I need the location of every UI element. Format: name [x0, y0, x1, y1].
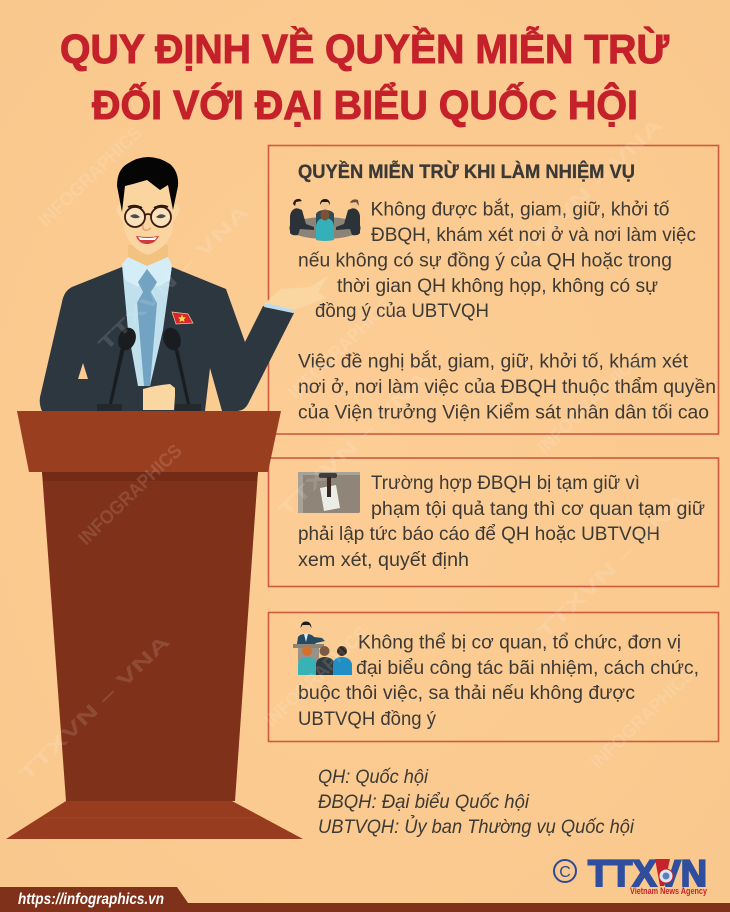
- panel: immunity on duty: [268, 146, 718, 434]
- paragraph: report to the National Assembly: xem xét, quyết định: [298, 549, 469, 571]
- eyebrows: [128, 206, 168, 208]
- copyright logo: Vietnam News Agency: [630, 886, 707, 896]
- abbreviation notes: ĐBQH: Đại biểu Quốc hội: [318, 791, 530, 813]
- watermarks: INFOGRAPHICS: [587, 665, 699, 774]
- watermarks: INFOGRAPHICS: [75, 441, 187, 550]
- watermarks: TTXVN – VNA: [95, 201, 254, 356]
- footer bar with URL: [0, 887, 730, 912]
- watermarks: TTXVN – VNA: [16, 631, 175, 786]
- shirt: [122, 265, 172, 386]
- speaker figure: [40, 157, 329, 411]
- neck: [128, 245, 168, 268]
- pocket: [78, 363, 88, 379]
- microphones: [97, 325, 201, 411]
- watermarks: TTXVN – VNA: [534, 489, 693, 644]
- jacket: [40, 267, 294, 411]
- hand on podium: [143, 384, 175, 410]
- watermarks: INFOGRAPHICS: [534, 350, 646, 459]
- watermarks: INFOGRAPHICS: [261, 623, 373, 732]
- star: [178, 314, 186, 322]
- watermarks: INFOGRAPHICS: [35, 123, 147, 232]
- icon: desk with document: [298, 472, 360, 513]
- podium: [6, 411, 303, 839]
- eyes: [130, 214, 166, 218]
- watermarks: TTXVN – VNA: [275, 367, 434, 522]
- abbreviation notes: UBTVQH: Ủy ban Thường vụ Quốc hội: [318, 814, 635, 838]
- paragraph: authority of the procuracy: [298, 350, 716, 424]
- paragraph: report to the National Assembly: Trường hợp ĐBQH bị tạm giữ vì: [371, 472, 640, 494]
- head: [116, 180, 180, 255]
- paragraph: dismissal needs consent: Không thể bị cơ quan, tổ chức, đơn vị: [358, 632, 681, 654]
- panel: no dismissal: [268, 612, 718, 742]
- collar: [122, 257, 172, 287]
- paragraph: authority of the procuracy: nơi ở, nơi làm việc của ĐBQH thuộc thẩm quyền: [298, 376, 716, 398]
- title: QUY ĐỊNH VỀ QUYỀN MIỄN TRỪ: [60, 26, 670, 72]
- cuff: [264, 303, 294, 313]
- paragraph: arrest restrictions: nếu không có sự đồng ý của QH hoặc trong: [298, 250, 672, 272]
- paragraph: dismissal needs consent: đại biểu công tác bãi nhiệm, cách chức,: [356, 657, 699, 679]
- paragraph: dismissal needs consent: UBTVQH đồng ý: [298, 708, 436, 730]
- icon: meeting around a table: [289, 199, 361, 241]
- copyright logo: TTXVN: [588, 853, 707, 894]
- panel heading: QUYỀN MIỄN TRỪ KHI LÀM NHIỆM VỤ: [298, 161, 635, 183]
- glasses: [125, 207, 171, 227]
- illustration: speaker at podium: [6, 157, 329, 839]
- paragraph: arrest restrictions: [298, 198, 696, 322]
- abbreviation notes: QH: Quốc hội: [318, 766, 429, 788]
- paragraph: authority of the procuracy: Việc đề nghị bắt, giam, giữ, khởi tố, khám xét: [298, 350, 689, 372]
- paragraph: arrest restrictions: đồng ý của UBTVQH: [315, 300, 489, 322]
- watermarks: INFOGRAPHICS: [285, 295, 397, 404]
- panel: caught red-handed: [268, 458, 718, 586]
- footer bar with URL: https://infographics.vn: [18, 891, 164, 908]
- title: [60, 26, 670, 128]
- icon: speaker with audience: [293, 622, 352, 675]
- paragraph: authority of the procuracy: của Viện trưởng Viện Kiểm sát nhân dân tối cao: [298, 402, 709, 424]
- hair: [117, 157, 178, 212]
- paragraph: arrest restrictions: ĐBQH, khám xét nơi ở và nơi làm việc: [371, 224, 696, 246]
- paragraph: report to the National Assembly: [298, 472, 705, 571]
- paragraph: arrest restrictions: Không được bắt, giam, giữ, khởi tố: [370, 198, 670, 220]
- necktie: [137, 269, 157, 386]
- watermarks: TTXVN – VNA: [509, 114, 668, 269]
- mouth: [136, 236, 159, 244]
- hand pointing: [264, 275, 329, 310]
- title: ĐỐI VỚI ĐẠI BIỂU QUỐC HỘI: [92, 81, 638, 128]
- watermarks: [16, 114, 699, 786]
- paragraph: arrest restrictions: thời gian QH không họp, không có sự: [337, 275, 658, 297]
- copyright logo: C: [559, 864, 571, 881]
- nose: [143, 224, 151, 230]
- paragraph: report to the National Assembly: phải lập tức báo cáo để QH hoặc UBTVQH: [298, 523, 660, 545]
- paragraph: dismissal needs consent: buộc thôi việc, sa thải nếu không được: [298, 682, 635, 704]
- paragraph: dismissal needs consent: [298, 632, 699, 730]
- flag pin: [172, 312, 193, 324]
- abbreviation notes: [318, 766, 635, 838]
- paragraph: report to the National Assembly: phạm tội quả tang thì cơ quan tạm giữ: [371, 498, 705, 520]
